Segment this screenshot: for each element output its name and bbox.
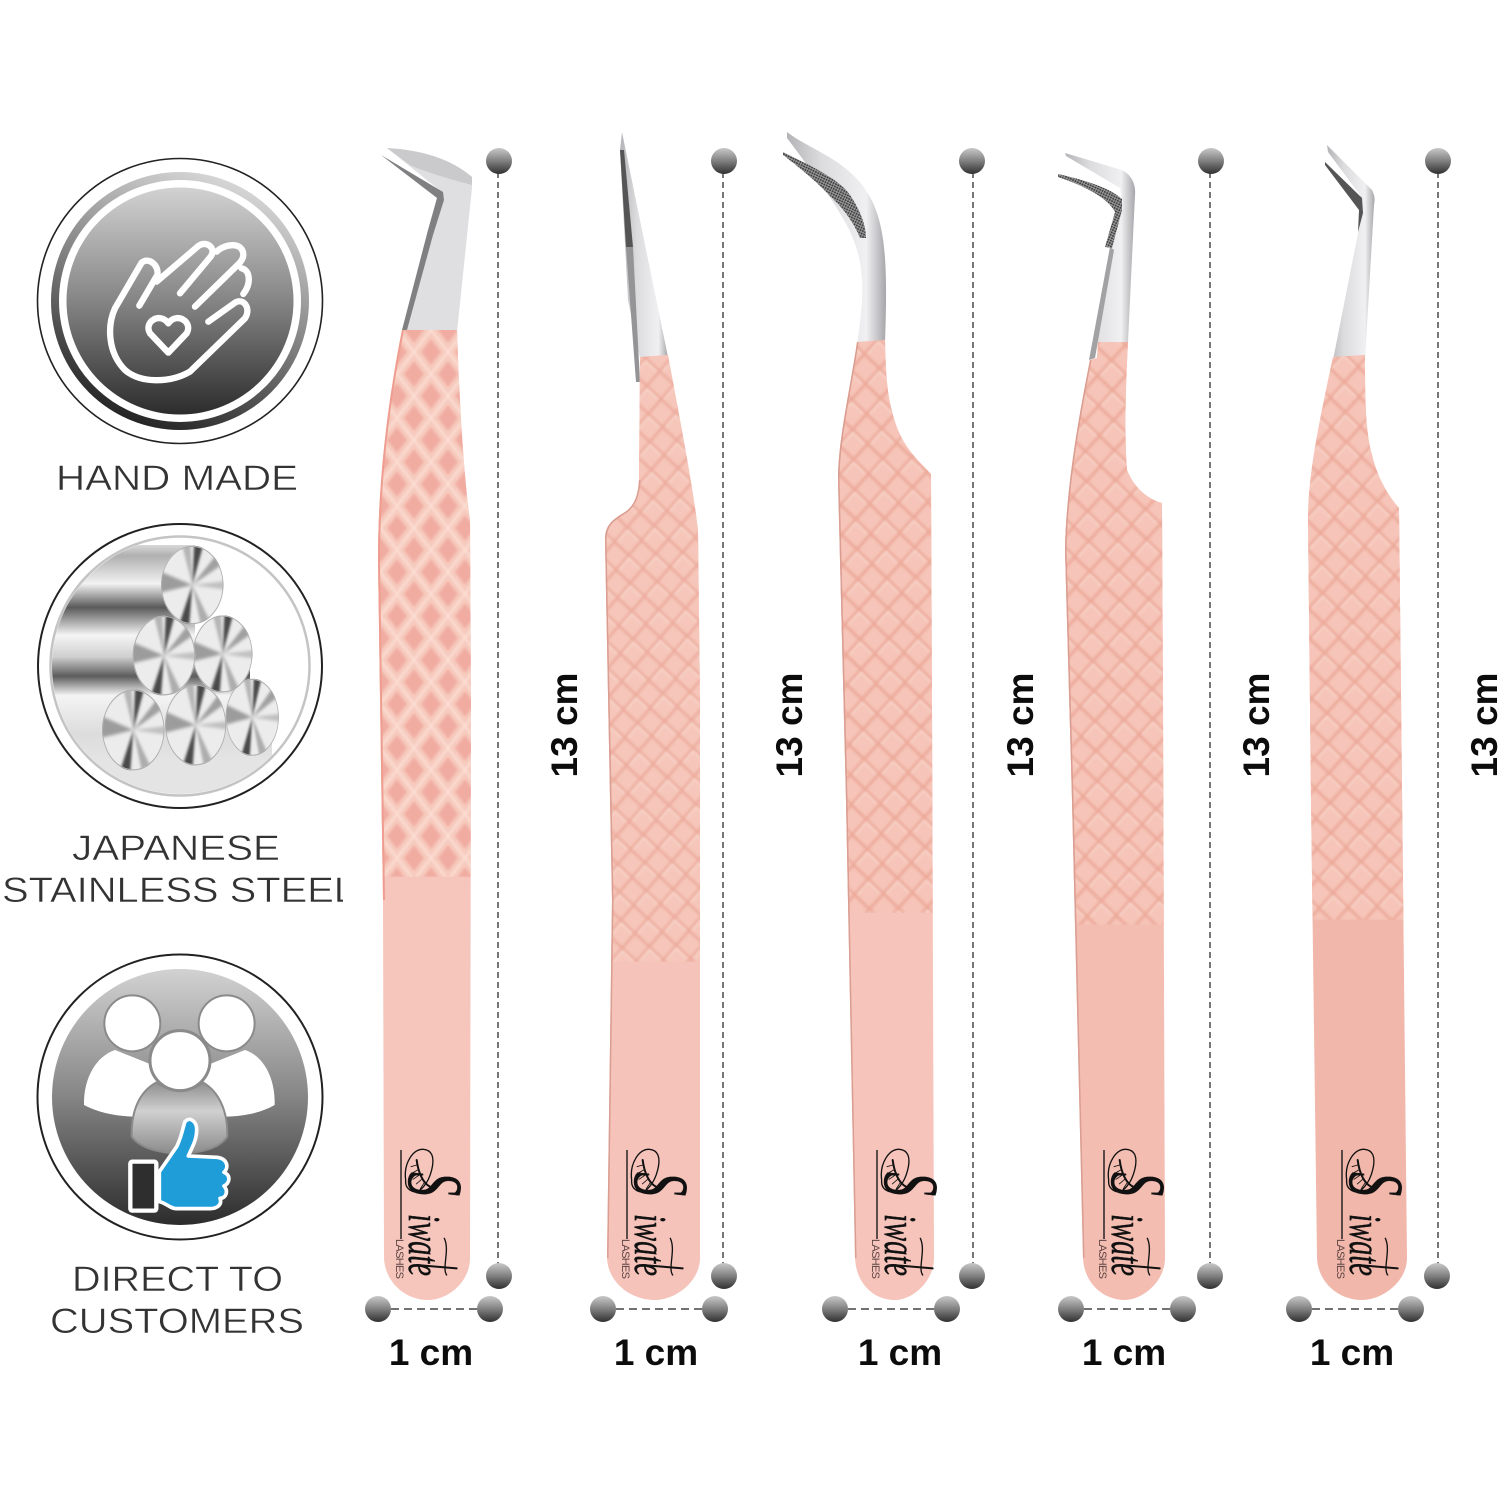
tweezer 4	[1058, 153, 1165, 1300]
length labels: 13 cm	[544, 673, 585, 777]
tweezer 3	[783, 132, 954, 1308]
logo: S iwate	[867, 1172, 954, 1276]
logo: LASHES	[619, 1239, 631, 1279]
label: direct to: DIRECT TO	[72, 1260, 283, 1299]
logo: S iwate	[617, 1172, 704, 1276]
label: customers: CUSTOMERS	[50, 1302, 304, 1341]
metal bar stack	[52, 545, 279, 794]
label: hand made: HAND MADE	[56, 459, 298, 498]
dimension lines: length	[498, 172, 1438, 1265]
tweezer 1	[378, 148, 472, 1300]
width labels	[389, 1332, 1394, 1373]
logo: LASHES	[1096, 1239, 1108, 1279]
length labels: 13 cm	[1236, 673, 1277, 777]
logo: S iwate	[391, 1172, 478, 1276]
width labels: 1 cm	[614, 1332, 698, 1373]
logo: S iwate	[1332, 1172, 1419, 1276]
width labels: 1 cm	[389, 1332, 473, 1373]
logo: LASHES	[869, 1239, 881, 1279]
thumbs up	[130, 1119, 229, 1211]
width labels: 1 cm	[1082, 1332, 1166, 1373]
length labels: 13 cm	[1000, 673, 1041, 777]
badge: hand made	[38, 158, 322, 444]
tweezer 2	[605, 132, 700, 1300]
icon: open hand with heart	[110, 244, 249, 380]
tweezer 5	[1308, 145, 1407, 1300]
length labels: 13 cm	[769, 673, 810, 777]
logo: S iwate	[1094, 1172, 1181, 1276]
width labels: 1 cm	[1310, 1332, 1394, 1373]
badge: direct to customers	[38, 954, 322, 1240]
dimension lines: width	[391, 1308, 1399, 1310]
badge: japanese stainless steel	[38, 524, 322, 808]
length labels	[544, 673, 1498, 777]
measurement balls	[365, 148, 1451, 1322]
logo: LASHES	[1334, 1239, 1346, 1279]
icon: three customers with thumbs up	[84, 995, 275, 1211]
logo: LASHES	[393, 1239, 405, 1279]
label: japanese stainless steel: JAPANESE	[72, 829, 280, 868]
label: stainless steel second line: STAINLESS STEEL	[2, 871, 356, 910]
width labels: 1 cm	[858, 1332, 942, 1373]
